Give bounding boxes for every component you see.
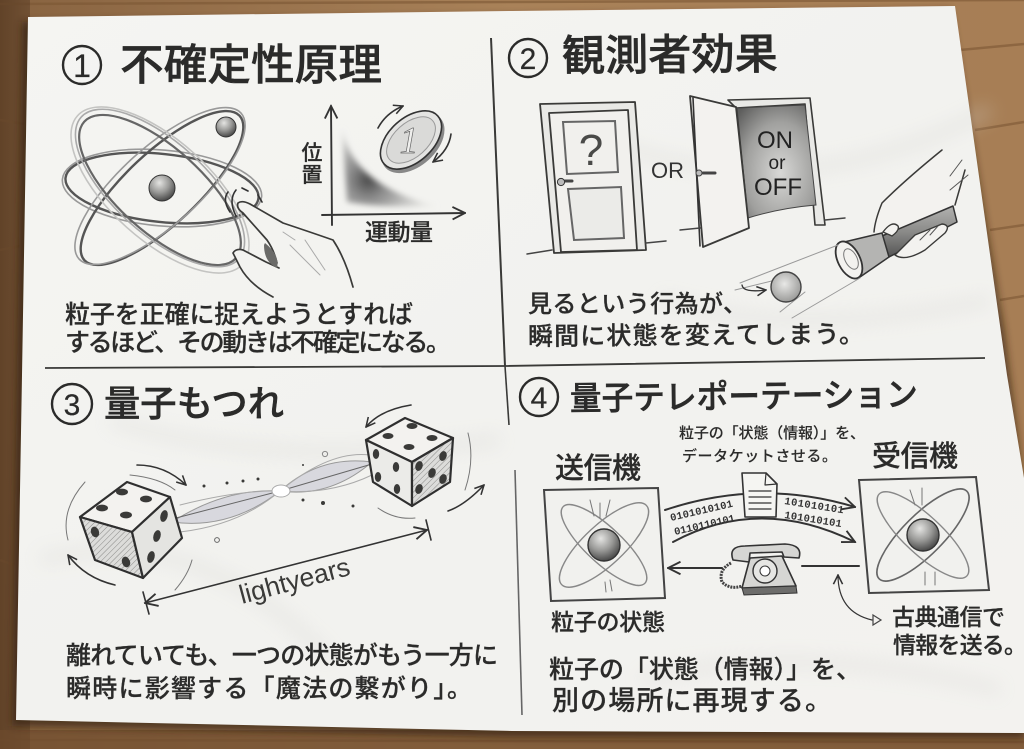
body text 3: 離れていても、一つの状態がもう一方に xyxy=(66,642,498,670)
icon: hand holding flashlight xyxy=(735,150,968,318)
receiver box with atom xyxy=(859,477,989,593)
icon: spinning coin: 1 xyxy=(400,120,418,162)
heading 3: 量子もつれ xyxy=(104,383,284,424)
caption: data packet note: 粒子の「状態（情報）」を、 xyxy=(679,424,865,442)
question mark: ? xyxy=(579,126,603,175)
body text 1 xyxy=(65,301,451,357)
entanglement beam xyxy=(172,451,372,542)
panel 3: entanglement xyxy=(52,383,498,703)
callout text: classical communication: 古典通信で xyxy=(892,604,1005,630)
distance arrow: lightyears: lightyears xyxy=(236,551,353,610)
body text 2: 見るという行為が、 xyxy=(528,291,747,318)
icon: right die xyxy=(366,405,484,518)
binary digits left: 0101010101 xyxy=(669,499,734,525)
label: sender: 送信機 xyxy=(555,452,641,485)
axis label: position: 置 xyxy=(302,164,322,187)
icon: left die xyxy=(66,465,192,590)
heading 1: 不確定性原理 xyxy=(120,42,382,90)
heading 1: 1 xyxy=(73,48,91,84)
arrows: quantum data transfer xyxy=(665,493,855,542)
callout arrow xyxy=(838,575,881,625)
icon: pointing hand xyxy=(233,202,353,297)
body text 4 xyxy=(549,656,861,716)
door leaf xyxy=(690,96,749,247)
panel 4: quantum teleportation xyxy=(520,376,1024,716)
heading 3: 3 xyxy=(64,389,80,422)
label: particle state: 粒子の状態 xyxy=(551,609,665,635)
body text 4: 別の場所に再現する。 xyxy=(552,686,832,716)
ON or OFF text: ON xyxy=(757,127,793,154)
axis label: momentum: 運動量 xyxy=(365,219,433,245)
heading 2: 2 xyxy=(520,43,536,76)
axis label: position xyxy=(302,142,322,187)
binary digits left xyxy=(669,499,736,539)
label: OR: OR xyxy=(651,158,684,183)
caption: data packet note: データケットさせる。 xyxy=(682,447,837,465)
label: receiver: 受信機 xyxy=(872,440,958,473)
body text 4: 粒子の「状態（情報）」を、 xyxy=(549,656,861,684)
ON or OFF text xyxy=(754,127,802,201)
binary digits right: 101010101 xyxy=(783,510,843,531)
chart: position vs momentum xyxy=(302,106,465,245)
body text 2: 瞬間に状態を変えてしまう。 xyxy=(528,321,864,351)
binary digits right: 101010101 xyxy=(783,496,845,517)
icon: closed door xyxy=(527,102,666,254)
ON or OFF text: OFF xyxy=(754,174,802,201)
axis label: position: 位 xyxy=(302,142,322,165)
ON or OFF text: or xyxy=(769,153,786,174)
icon: open door with ON or OFF xyxy=(680,96,845,247)
panel 2: observer effect xyxy=(509,31,968,351)
heading 2: 観測者効果 xyxy=(562,31,778,81)
panel 1: uncertainty principle xyxy=(44,42,465,357)
icon: spinning coin xyxy=(370,100,456,185)
body text 2 xyxy=(528,291,864,351)
body text 1: するほど、その動きは不確定になる。 xyxy=(65,329,451,357)
body text 3 xyxy=(66,642,498,703)
arrow: classical communication xyxy=(668,566,859,568)
callout text: classical communication xyxy=(892,604,1024,658)
body text 1: 粒子を正確に捉えようとすれば xyxy=(65,301,413,329)
heading 4: 4 xyxy=(531,382,547,415)
callout text: classical communication: 情報を送る。 xyxy=(893,632,1024,658)
icon: observed ball xyxy=(742,272,801,302)
icon: rotary telephone xyxy=(721,544,800,595)
atom illustration xyxy=(44,79,276,301)
distance arrow: lightyears xyxy=(143,520,431,614)
sender box with atom xyxy=(544,488,665,601)
icon: document xyxy=(742,473,777,517)
binary digits right xyxy=(783,496,845,531)
binary digits left: 0110110101 xyxy=(673,513,736,539)
heading 4: 量子テレポーテーション xyxy=(570,376,918,417)
body text 3: 瞬時に影響する「魔法の繋がり」。 xyxy=(66,675,472,703)
caption: data packet note xyxy=(679,424,865,465)
